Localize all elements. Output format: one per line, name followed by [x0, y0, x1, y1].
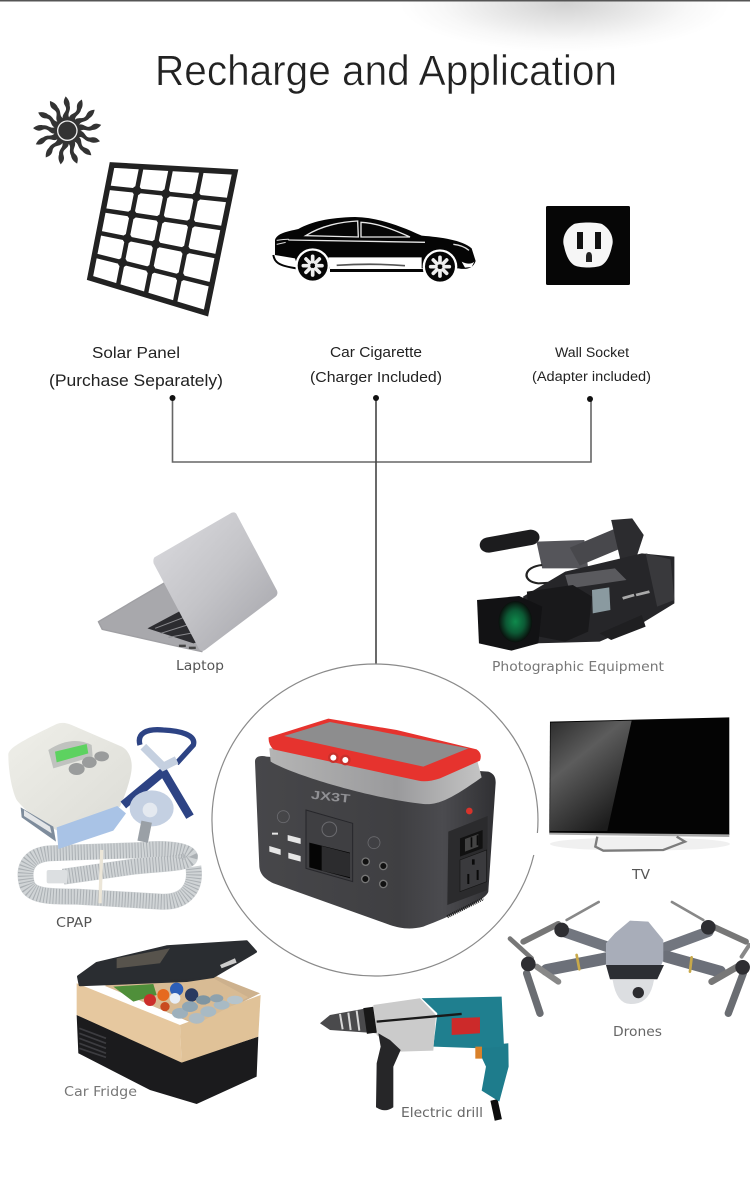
icon: car [273, 217, 476, 284]
cpap machine [8, 723, 194, 903]
grey top band [269, 740, 482, 804]
label: wall socket: Wall Socket [555, 345, 629, 360]
label: car cigarette [310, 345, 442, 386]
dc jacks [362, 858, 387, 888]
icon: wall socket [546, 206, 630, 285]
label: car fridge: Car Fridge [64, 1084, 137, 1100]
label: drones: Drones [613, 1024, 662, 1040]
station body [255, 756, 496, 928]
title: Recharge and Application [155, 47, 617, 95]
usb ports [269, 833, 301, 862]
label: solar panel [49, 345, 223, 390]
label: solar panel: (Purchase Separately) [49, 372, 223, 390]
label: electric drill: Electric drill [401, 1105, 483, 1121]
power station [255, 719, 496, 928]
laptop [98, 512, 277, 652]
label: car cigarette: (Charger Included) [310, 370, 442, 386]
hinges [328, 752, 351, 765]
label: car cigarette: Car Cigarette [330, 345, 422, 361]
product circle [212, 664, 538, 976]
connector lines [170, 395, 593, 664]
car fridge [77, 942, 261, 1104]
cpap mask [123, 730, 194, 842]
drone [510, 902, 750, 1013]
electric drill [320, 997, 509, 1120]
ac outlets [447, 816, 488, 917]
icon: solar panel [90, 165, 235, 313]
cpap unit [8, 723, 132, 831]
front panel [306, 810, 353, 882]
label: solar panel: Solar Panel [92, 345, 180, 362]
label: photographic equipment: Photographic Equipment [492, 659, 664, 675]
icon: sun [33, 96, 102, 165]
red lid [269, 719, 481, 781]
fridge contents [113, 983, 243, 1024]
photographic equipment camera [477, 518, 674, 651]
lid top surface [284, 722, 468, 767]
top shadow [400, 0, 730, 52]
top edge strip [0, 0, 750, 2]
label: tv: TV [631, 867, 651, 883]
label: cpap: CPAP [56, 915, 92, 931]
label: wall socket [532, 345, 651, 384]
buttons [277, 811, 380, 849]
cpap hose [26, 849, 194, 903]
brand logo: JX3T [310, 788, 352, 806]
label: laptop: Laptop [176, 658, 224, 674]
label: wall socket: (Adapter included) [532, 369, 651, 384]
led indicator [466, 808, 473, 814]
tv [549, 717, 730, 851]
